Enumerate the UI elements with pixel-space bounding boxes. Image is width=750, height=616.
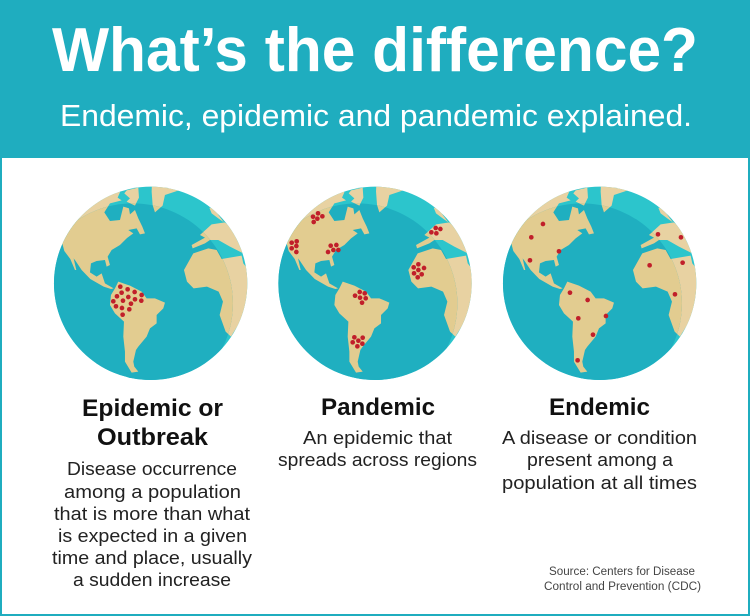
description: epidemic: a sudden increase bbox=[73, 570, 231, 590]
globe: pandemic bbox=[275, 183, 478, 383]
description: pandemic: spreads across regions bbox=[278, 450, 477, 470]
title: What’s the difference? bbox=[52, 16, 698, 85]
heading: epidemic or outbreak: Epidemic or bbox=[82, 395, 223, 422]
globe: epidemic bbox=[50, 183, 254, 383]
description: epidemic: Disease occurrence bbox=[67, 459, 237, 479]
outbreak dots bbox=[111, 284, 144, 317]
globe: endemic bbox=[499, 183, 703, 383]
description: pandemic bbox=[278, 428, 477, 470]
description: epidemic bbox=[52, 459, 252, 590]
source note: Control and Prevention (CDC) bbox=[544, 581, 701, 593]
endemic dots bbox=[528, 222, 685, 363]
description: epidemic: is expected in a given bbox=[58, 526, 247, 546]
white panel border bbox=[1, 157, 749, 615]
heading: epidemic or outbreak bbox=[82, 395, 223, 451]
description: epidemic: time and place, usually bbox=[52, 548, 252, 568]
heading: endemic: Endemic bbox=[549, 394, 650, 421]
column: endemic text bbox=[502, 394, 697, 493]
description: epidemic: among a population bbox=[64, 482, 241, 502]
column: epidemic text bbox=[52, 395, 252, 590]
heading: pandemic: Pandemic bbox=[321, 394, 435, 421]
description: endemic: population at all times bbox=[502, 473, 697, 493]
description: epidemic: that is more than what bbox=[54, 504, 250, 524]
description: endemic: A disease or condition bbox=[502, 428, 697, 448]
description: pandemic: An epidemic that bbox=[303, 428, 452, 448]
heading: epidemic or outbreak: Outbreak bbox=[97, 424, 209, 451]
source note bbox=[544, 566, 701, 593]
source note: Source: Centers for Disease bbox=[549, 566, 695, 578]
description: endemic bbox=[502, 428, 697, 493]
pandemic dots bbox=[289, 211, 443, 349]
column: pandemic text bbox=[278, 394, 477, 470]
header band bbox=[0, 0, 750, 156]
description: endemic: present among a bbox=[527, 450, 674, 470]
subtitle: Endemic, epidemic and pandemic explained. bbox=[60, 98, 692, 133]
